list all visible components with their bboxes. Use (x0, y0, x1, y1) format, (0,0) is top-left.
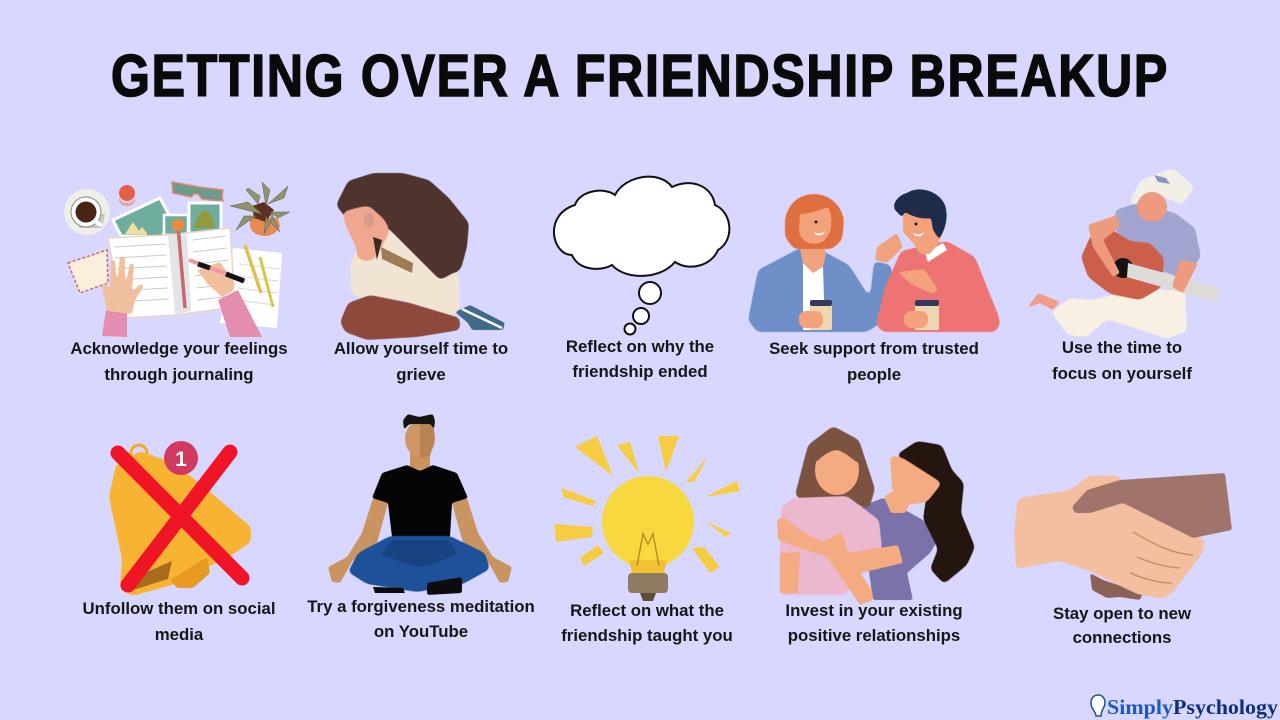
caption: row two: Reflect on what the (570, 601, 724, 620)
caption: row one: Seek support from trusted (769, 339, 979, 358)
caption: row two: Unfollow them on social (82, 599, 276, 618)
caption: row one: people (847, 365, 901, 384)
caption: row two: media (155, 625, 204, 644)
caption: row two: Invest in your existing (785, 601, 963, 620)
caption: row one: Reflect on why the (566, 337, 714, 356)
icon: woman playing guitar (1027, 168, 1220, 339)
icon: handshake (1014, 473, 1232, 600)
caption: row one: Acknowledge your feelings (70, 339, 288, 358)
caption: row one: focus on yourself (1052, 364, 1192, 383)
caption: row two: on YouTube (374, 622, 468, 641)
icon: meditating man (328, 414, 512, 595)
icon: crossed notification bell (109, 441, 251, 596)
icon: grieving person (336, 173, 505, 340)
icon: light bulb with rays (554, 436, 740, 601)
caption: row one: Allow yourself time to (334, 339, 508, 358)
caption: row one (70, 337, 1192, 384)
caption: row two: friendship taught you (561, 626, 733, 645)
caption: row one: Use the time to (1062, 338, 1182, 357)
icon: thought bubble (554, 177, 729, 334)
icon: two women hugging (777, 426, 975, 605)
icon: two friends talking (748, 189, 1000, 332)
caption: row two: Try a forgiveness meditation (307, 597, 535, 616)
icon: crossed notification bell: 1 (175, 448, 187, 471)
icon: journaling desk (64, 182, 290, 337)
caption: row two (82, 597, 1192, 647)
caption: row one: grieve (396, 365, 446, 384)
logo: Simply Psychology: SimplyPsychology (1107, 695, 1279, 719)
caption: row one: friendship ended (572, 362, 708, 381)
caption: row one: through journaling (104, 365, 254, 384)
caption: row two: positive relationships (788, 626, 960, 645)
caption: row two: Stay open to new (1053, 604, 1192, 623)
caption: row two: connections (1073, 628, 1171, 647)
